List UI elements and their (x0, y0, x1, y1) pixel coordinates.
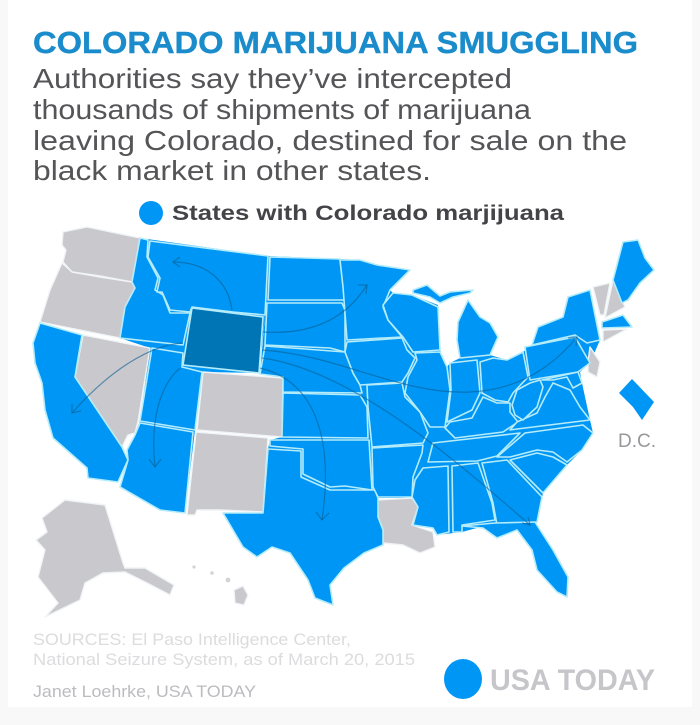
arrow: to Minnesota (263, 285, 367, 332)
smuggling arrows (72, 257, 577, 525)
state: Nevada (75, 335, 150, 447)
arrow: to Arizona (149, 368, 180, 467)
map: gray states without Colorado marijuana (36, 227, 627, 617)
state: Oklahoma (270, 440, 372, 490)
subtitle text block: thousands of shipments of marijuana (33, 94, 531, 125)
state: North Dakota (268, 257, 345, 300)
arrow: to Texas (260, 368, 329, 520)
state: Kansas (282, 393, 368, 438)
subtitle text block (33, 63, 627, 186)
state: New York (532, 290, 600, 345)
arrow: to Montana/northwest (173, 257, 232, 310)
state: Connecticut and Rhode Island (603, 329, 627, 342)
subtitle text block: black market in other states. (33, 155, 431, 186)
sources text (33, 630, 415, 669)
state: Michigan upper peninsula (413, 285, 473, 303)
state: Idaho (120, 238, 190, 345)
state: Maryland and Delaware (542, 372, 582, 388)
sources text: National Seizure System, as of March 20, 2015 (33, 650, 415, 669)
state: Wisconsin (383, 293, 440, 352)
state: Alabama (452, 463, 495, 532)
state: North Carolina (497, 425, 593, 462)
state: Montana (148, 241, 268, 315)
logo: USA TODAY (444, 659, 655, 699)
state: Hawaii (234, 586, 248, 605)
map backing: eastern silhouette (260, 256, 600, 545)
state: New Hampshire (605, 280, 625, 318)
hawaii small islands (192, 565, 230, 582)
state: Michigan lower peninsula (457, 300, 498, 358)
state: Arizona (120, 423, 193, 513)
state: Iowa (345, 338, 415, 385)
map: blue states with Colorado marijuana (33, 238, 654, 605)
legend: States with Colorado marjijuana (172, 202, 564, 225)
state: New Jersey (588, 347, 600, 377)
state: Vermont (593, 283, 610, 315)
state: Massachusetts (602, 315, 632, 328)
state: Oregon (40, 263, 135, 338)
state: Texas (223, 449, 383, 605)
state: Colorado (197, 372, 283, 437)
state: Maine (613, 240, 654, 303)
label: D.C.: D.C. (618, 431, 656, 452)
state: West Virginia (512, 380, 543, 420)
state: Mississippi (412, 466, 449, 535)
map backing: western silhouette (120, 238, 268, 513)
state: Georgia (482, 460, 542, 525)
state: Utah (140, 348, 202, 430)
state: Wyoming (highlighted) (183, 308, 263, 373)
state: Illinois (405, 352, 450, 427)
title: COLORADO MARIJUANA SMUGGLING (33, 25, 638, 60)
sources text: SOURCES: El Paso Intelligence Center, (33, 630, 351, 649)
state: Virginia (510, 383, 590, 430)
state: Tennessee (428, 433, 520, 462)
icon: D.C. (619, 379, 654, 420)
state: Indiana (447, 360, 480, 422)
state: South Dakota (265, 303, 345, 352)
state: Kentucky (445, 397, 518, 438)
state: South Carolina (510, 453, 567, 493)
state: Louisiana (377, 498, 435, 553)
state: Washington (62, 227, 140, 282)
state: Minnesota (340, 260, 410, 340)
state: Arkansas (372, 445, 423, 497)
logo: USA TODAY: USA TODAY (490, 664, 655, 697)
state: Alaska (36, 500, 174, 617)
state: Missouri (367, 383, 428, 447)
state: Ohio (480, 352, 528, 402)
state: New Mexico (187, 432, 268, 515)
state: Florida (462, 522, 568, 597)
subtitle text block: leaving Colorado, destined for sale on the (33, 125, 627, 156)
arrow: to California (72, 343, 183, 413)
arrow: to Florida (262, 358, 530, 525)
state: Nebraska (260, 346, 362, 393)
subtitle text block: Authorities say they’ve intercepted (33, 63, 512, 94)
state: California (33, 323, 128, 482)
arrow: to New York (262, 337, 577, 392)
credit: Janet Loehrke, USA TODAY (33, 682, 256, 701)
state: Pennsylvania (525, 337, 590, 380)
